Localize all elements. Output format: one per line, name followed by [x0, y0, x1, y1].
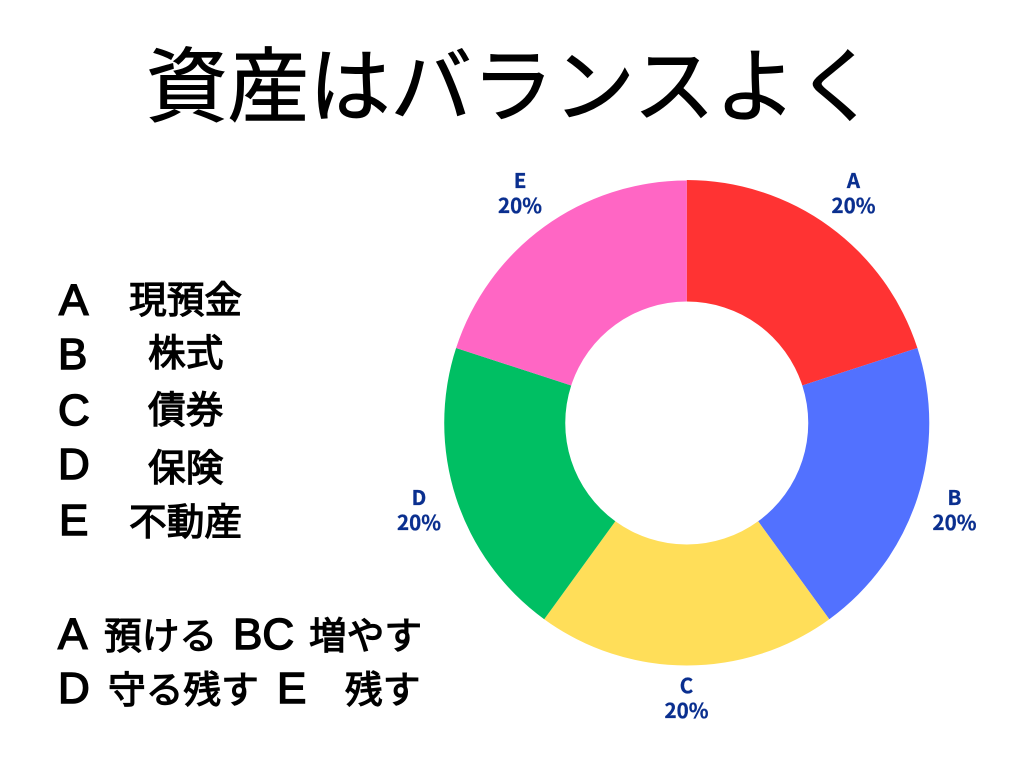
- label D 20%: 20%: [397, 506, 441, 536]
- label E 20%: E: [514, 164, 526, 194]
- label E 20%: [498, 164, 542, 219]
- strategy line 1: 預ける: [104, 605, 217, 660]
- label C 20%: [665, 669, 709, 724]
- text block: asset legend: [58, 269, 242, 546]
- strategy line 2: D: [58, 664, 90, 713]
- label B 20%: [933, 481, 977, 536]
- legend row C: C: [58, 386, 90, 435]
- legend row E: E: [59, 496, 88, 545]
- legend row B: 株式: [148, 322, 223, 377]
- segment B: blue: [758, 348, 929, 619]
- segment C: yellow: [544, 521, 829, 666]
- legend row A: 現預金: [129, 269, 242, 324]
- segment E: pink: [456, 180, 687, 385]
- label B 20%: B: [948, 481, 962, 511]
- segment D: green: [444, 348, 615, 619]
- label E 20%: 20%: [498, 189, 542, 219]
- label A 20%: A: [846, 164, 861, 194]
- legend row A: A: [59, 276, 88, 325]
- label C 20%: C: [680, 669, 693, 699]
- title: 資産はバランスよく: [146, 21, 878, 139]
- legend row E: 不動産: [129, 491, 242, 546]
- legend row D: D: [58, 440, 90, 489]
- label D 20%: [397, 481, 441, 536]
- segment A: red: [687, 180, 917, 385]
- label A 20%: [832, 164, 876, 219]
- legend row C: 債券: [148, 379, 223, 434]
- label B 20%: 20%: [933, 506, 977, 536]
- strategy line 2: E: [277, 664, 306, 713]
- legend row B: [58, 322, 223, 379]
- legend row A: [58, 269, 242, 325]
- legend row E: [59, 491, 242, 546]
- strategy line 2: 残す: [345, 659, 420, 714]
- strategy line 1: [57, 605, 422, 660]
- strategy line 2: [58, 659, 420, 714]
- strategy line 1: 増やす: [309, 605, 422, 660]
- legend row C: [58, 379, 224, 435]
- legend row D: [58, 437, 224, 492]
- legend row B: B: [58, 330, 87, 379]
- strategy line 1: BC: [233, 610, 294, 659]
- strategy line 1: A: [58, 610, 87, 659]
- legend row D: 保険: [148, 437, 223, 492]
- label A 20%: 20%: [832, 189, 876, 219]
- strategy line 2: 守る残す: [108, 659, 259, 714]
- label D 20%: D: [412, 481, 426, 511]
- label C 20%: 20%: [665, 694, 709, 724]
- text block: strategy notes: [57, 605, 422, 714]
